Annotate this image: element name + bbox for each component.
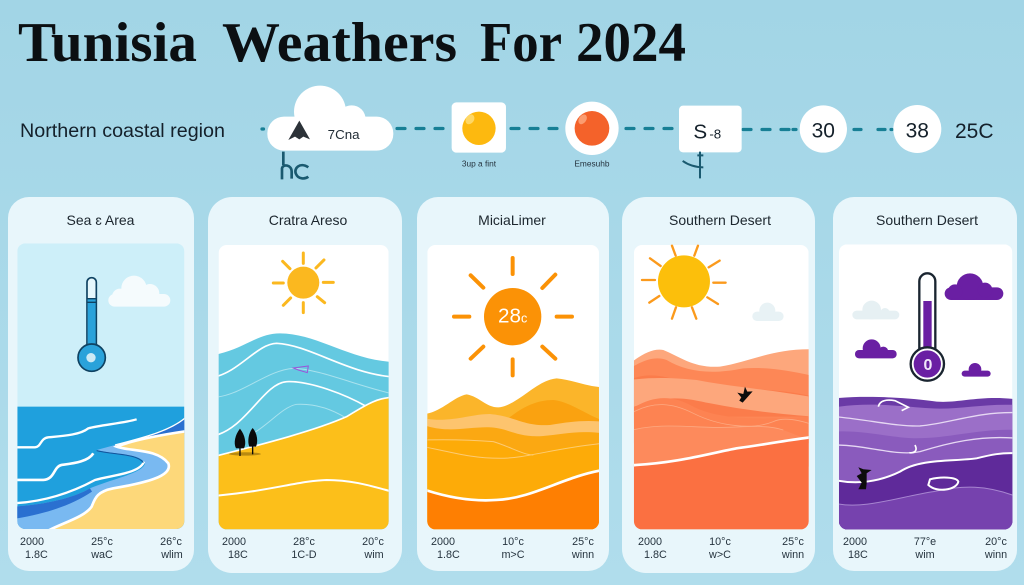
scene: purple dunes [835,244,1017,533]
value circle 30 [800,105,847,153]
panel heading: Sea ɛ Area [67,212,135,228]
title: Weathers [222,12,457,74]
stats row: 1C-D [291,549,317,561]
stats row: wlim [160,549,183,561]
icon: black animal [857,467,872,489]
panel: Cratra Areso [208,197,402,573]
panel: Sea Area [8,197,194,571]
stats row: winn [984,549,1007,561]
icon: thermometer [78,278,105,371]
icon: cloud with mountain: 7Cna [328,127,360,142]
stats row: 77°e [914,536,936,548]
icon: pale cloud [852,301,899,319]
icon: cloud with mountain [267,86,393,179]
icon: yellow sun tile: 3up a fint [462,159,497,169]
panel heading: MiciaLimer [478,212,546,228]
stats row: 2000 [843,536,867,548]
value 25C: 25C [955,120,994,143]
stats row: winn [781,549,804,561]
stats row: 10°c [502,536,524,548]
scene: hills [213,245,393,533]
stats row: wim [914,549,935,561]
value tile S-8: -8 [709,127,721,142]
stats row: wim [363,549,384,561]
stats row: 20°c [985,536,1007,548]
stats row [222,536,384,561]
stats row: 25°c [91,536,113,548]
icon: yellow sun tile [452,102,506,169]
value tile S-8: S [693,121,707,144]
stats row: 25°c [572,536,594,548]
panel: Southern Desert orange [622,197,815,573]
panel: MiciaLimer [417,197,609,571]
stats row: 26°c [160,536,182,548]
icon: purple clouds [855,273,1003,377]
stats row: 1.8C [437,549,460,561]
title: 2024 [576,12,686,74]
stats row [638,536,804,561]
region label: Northern coastal region [20,120,225,142]
stats row: 2000 [431,536,455,548]
stats row [431,536,594,561]
scene: orange dunes [423,245,603,533]
value circle 38 [893,105,941,153]
stats row: 28°c [293,536,315,548]
stats row: 1.8C [25,549,48,561]
stats row: 1.8C [644,549,667,561]
stats row: 10°c [709,536,731,548]
stats row: 2000 [222,536,246,548]
panel heading: Southern Desert [876,212,978,228]
panel: Southern Desert purple [833,197,1017,571]
timeline [262,86,994,179]
stats row: 2000 [638,536,662,548]
icon: sun [273,253,333,313]
icon: orange sun: Emesuhb [574,159,610,169]
stats row: 20°c [362,536,384,548]
icon: sun with temperature: 28c [498,305,527,328]
stats row: w>C [708,549,731,561]
title [18,12,686,74]
icon: purple thermometer [911,273,944,381]
stats row: waC [90,549,113,561]
panel heading: Southern Desert [669,212,771,228]
icon: purple thermometer: 0 [924,357,933,374]
connector dashes [262,128,892,130]
stats row [20,536,183,561]
icon: pale cloud [752,303,784,321]
panel heading: Cratra Areso [269,212,348,228]
stats row: winn [571,549,594,561]
icon: sun with temperature [454,258,572,375]
icon: cloud [108,276,170,307]
stats row: 25°c [782,536,804,548]
stats row: 2000 [20,536,44,548]
value circle 30: 30 [812,120,835,143]
icon: black bird [737,387,753,403]
stats row: 18C [228,549,248,561]
stats row: 18C [848,549,868,561]
icon: orange sun [565,102,619,169]
scene: red dunes [630,245,813,533]
icon: sun [642,246,726,319]
stats row [843,536,1007,561]
value circle 38: 38 [906,120,929,143]
value tile S-8 [679,106,742,178]
stats row: m>C [501,549,525,561]
title: For [480,12,562,74]
title: Tunisia [18,12,197,74]
icon: trees [235,428,257,456]
scene: sea and beach [13,243,190,533]
